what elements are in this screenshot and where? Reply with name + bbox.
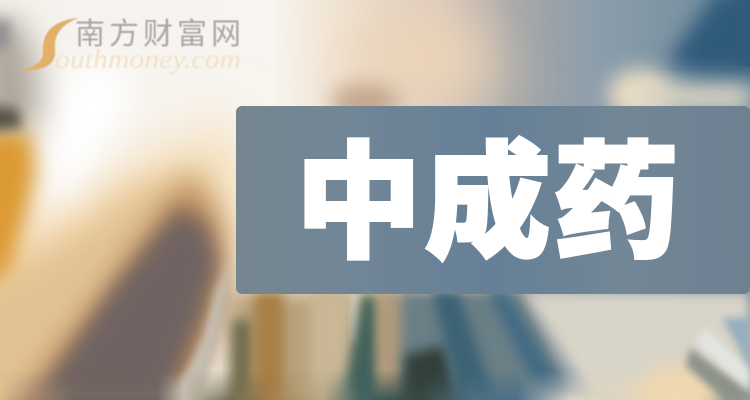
title text: 中成药 — [296, 102, 682, 284]
logo: southmoney — [20, 9, 245, 74]
logo chinese name: 南方财富网 — [75, 9, 245, 53]
icon: S swoosh — [20, 18, 79, 71]
logo latin name: outhmoney.com — [55, 44, 241, 74]
